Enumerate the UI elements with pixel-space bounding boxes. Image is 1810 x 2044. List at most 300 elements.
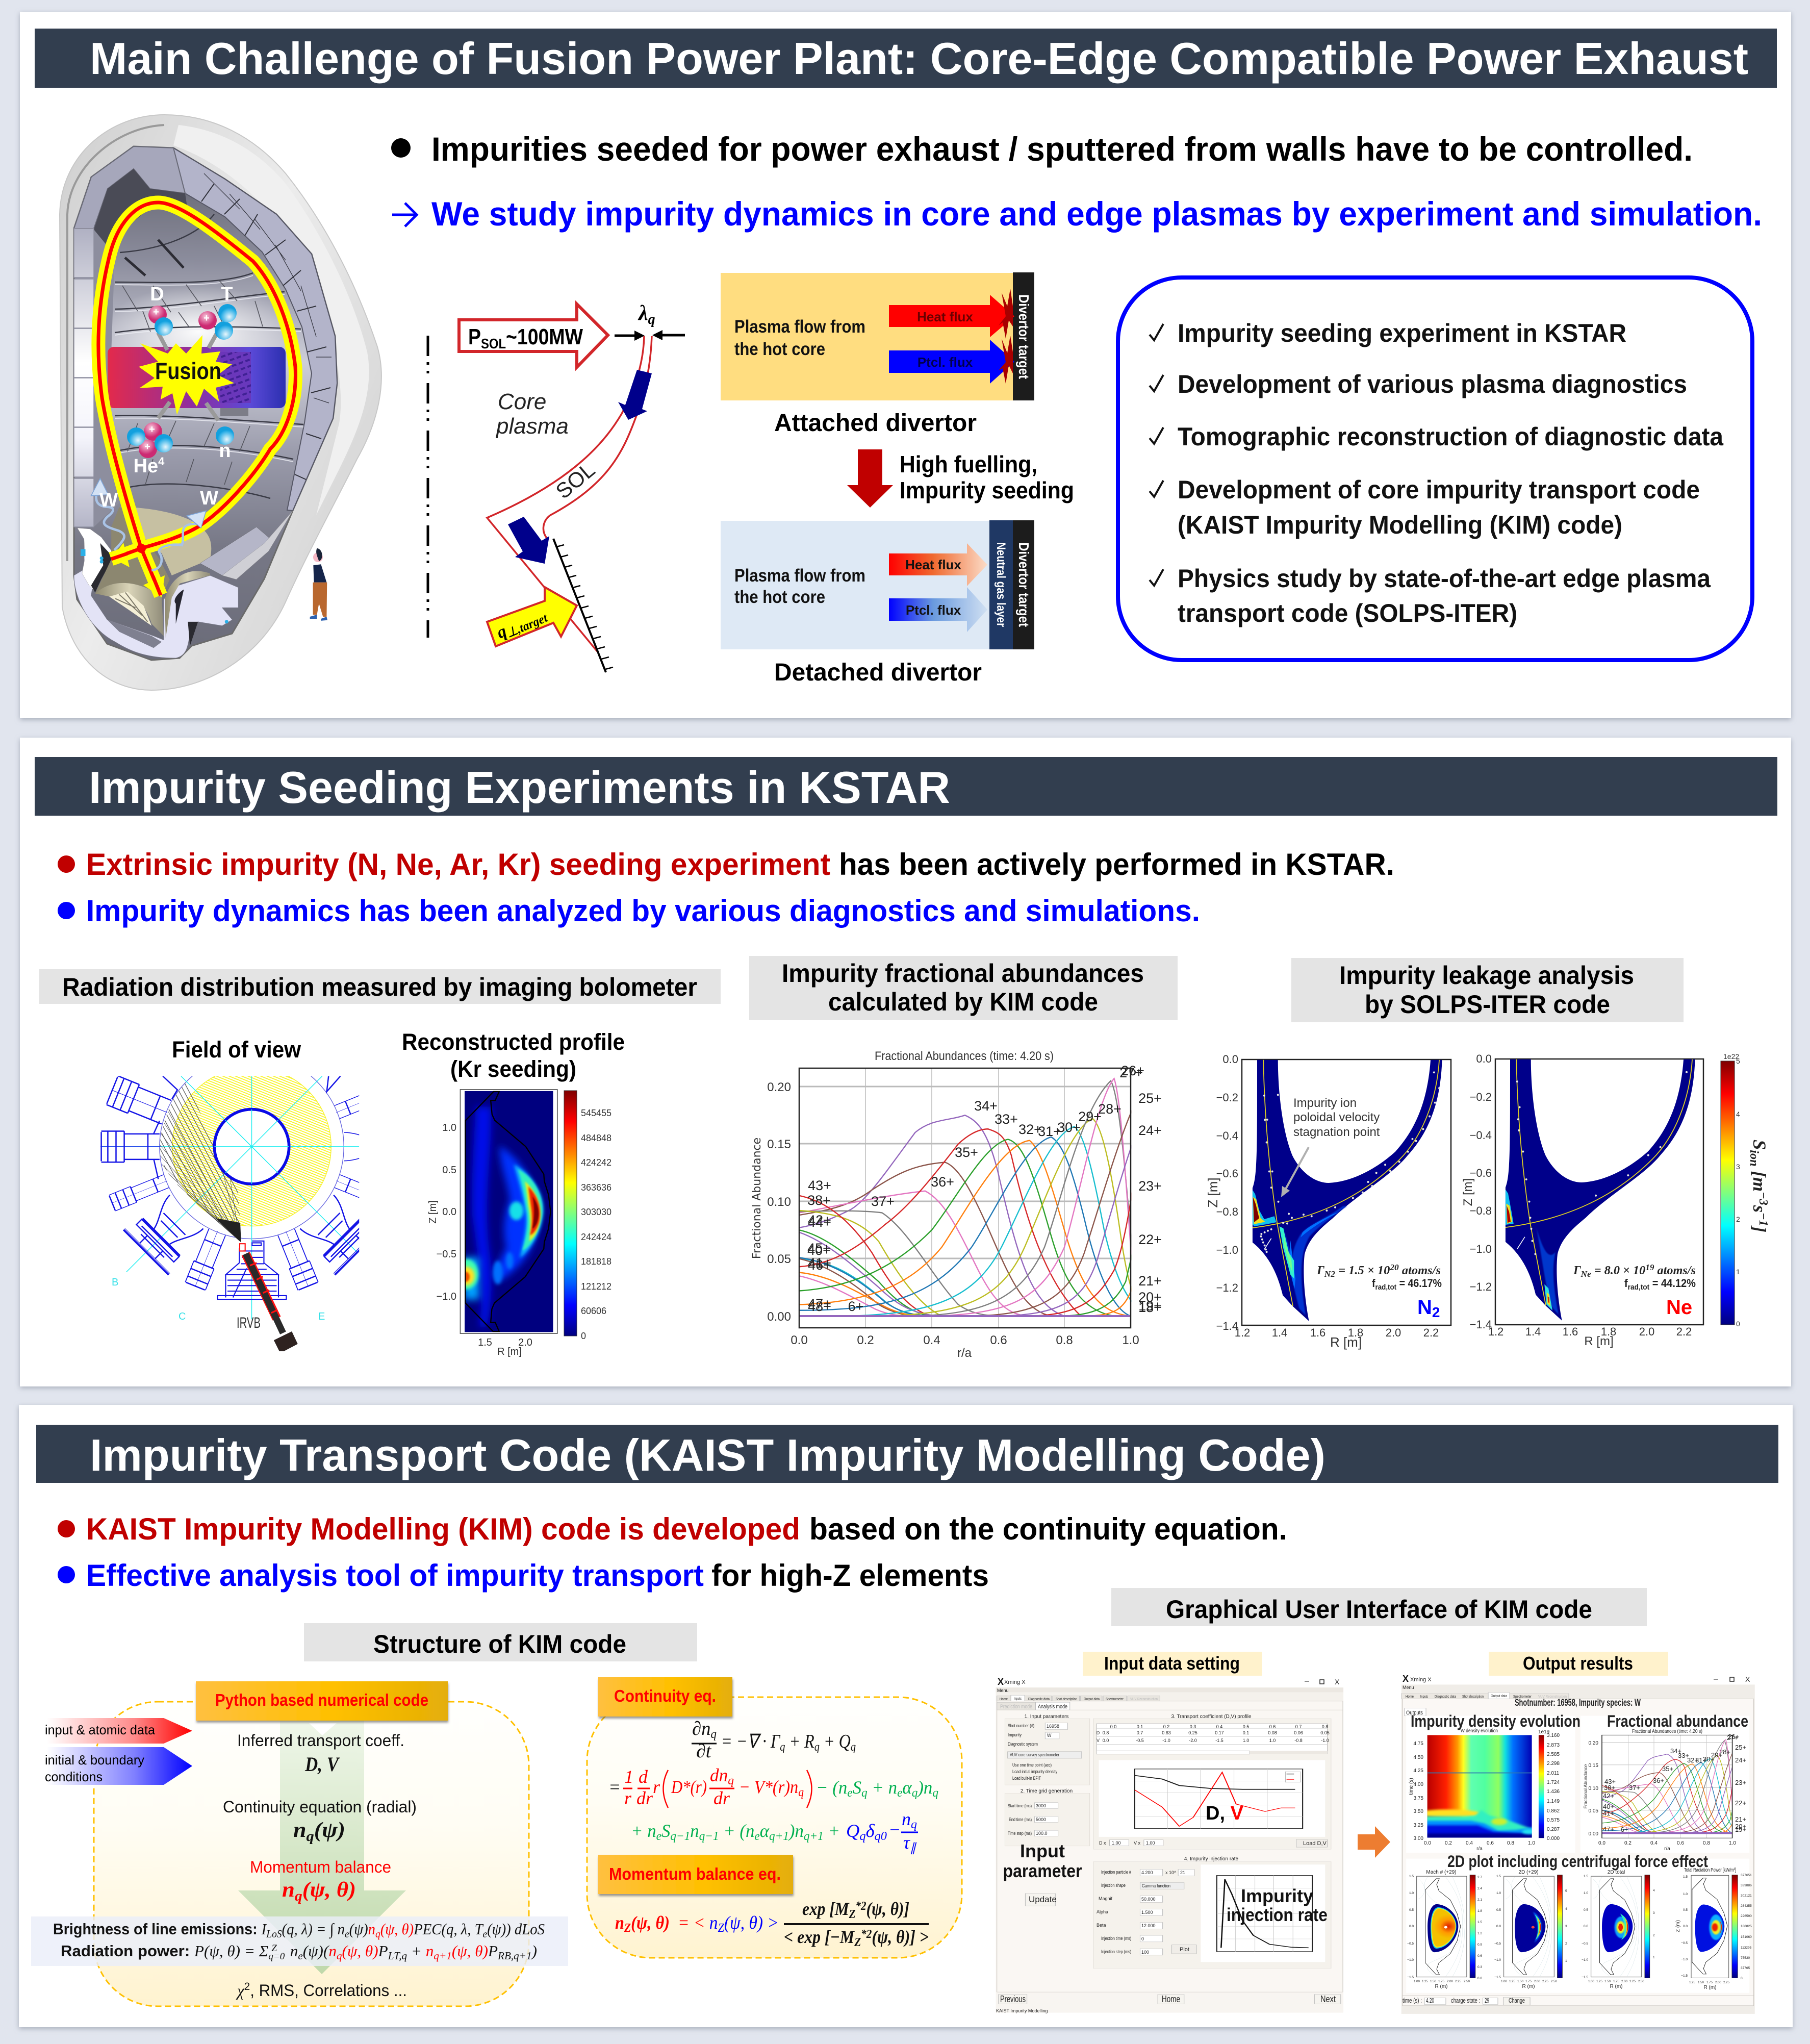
gui window: outputs: 0.6 [1487, 1840, 1494, 1846]
chart: SOLPS N2: Z [m] [1205, 1177, 1220, 1208]
gui window: outputs: 25+ [1735, 1744, 1746, 1751]
gui window: outputs: Fractional Abundance [1583, 1764, 1588, 1809]
gui window: inputs: 3000 [1036, 1803, 1046, 1808]
equation: diffusion and source terms: − (n [816, 1777, 848, 1798]
gui window: inputs: 0.06 [1294, 1730, 1303, 1735]
charge state labels: 20+ [1138, 1290, 1162, 1305]
gui window: outputs: 1.0 [1683, 1892, 1688, 1896]
chart: SOLPS Ne: 19 [1645, 1263, 1654, 1272]
gui window: outputs: −1.5 [1681, 1974, 1688, 1978]
chart: reconstructed radiation profile: 424242 [581, 1157, 611, 1168]
equation: diffusion and source terms: + (n [719, 1821, 754, 1841]
gui window: inputs: 1.00 [1112, 1840, 1121, 1846]
particles: + [203, 313, 210, 324]
equation: diffusion and source terms: n [902, 1809, 911, 1829]
chart: SOLPS N2: −1.2 [1216, 1281, 1238, 1294]
gui window: outputs: 21+ [1735, 1815, 1746, 1823]
label: output results [1489, 1652, 1668, 1676]
equation: diffusion and source terms: q+1 [769, 1830, 789, 1843]
equation: diffusion and source terms: ∥ [910, 1841, 917, 1855]
gui window: inputs: 0.8 [1322, 1724, 1328, 1729]
gui window: inputs: Gamma function [1142, 1883, 1170, 1888]
chi square metrics: 2 [244, 1981, 250, 1992]
equation: diffusion and source terms: d [639, 1767, 648, 1787]
gui window: outputs: 1.0 [1584, 1891, 1588, 1895]
gui window: outputs: 1.0 [1729, 1840, 1736, 1846]
charge state labels: 48+ [808, 1299, 831, 1314]
gui window: inputs: 0.25 [1188, 1730, 1197, 1735]
colourbar: ionization source: 3 [1736, 1163, 1740, 1171]
PSOL arrow [459, 304, 608, 367]
annotation: stagnation point: poloidal velocity [1293, 1111, 1380, 1124]
equation: continuity: + R [785, 1731, 814, 1752]
PSOL arrow: P [468, 324, 483, 349]
gui window: inputs: W [1047, 1733, 1052, 1738]
chart: SOLPS N2: 1.2 [1235, 1326, 1250, 1339]
chart: SOLPS N2: 20 [1389, 1263, 1399, 1272]
gui window: inputs: -1.0 [1321, 1738, 1329, 1743]
gui window: inputs: Diagnostic data [1028, 1697, 1050, 1701]
gui window: inputs: -0.8 [1294, 1738, 1303, 1743]
gui window: inputs: Plot [1180, 1947, 1189, 1953]
flow steps: q [295, 1888, 302, 1904]
gui window: inputs: 1.0 [1243, 1738, 1249, 1743]
gui window: inputs: V x [1134, 1840, 1141, 1846]
fusion star: Fusion [155, 358, 221, 384]
gui window: outputs: 1.25 [1422, 1980, 1428, 1983]
gui window: inputs: Load initial impurity density [1012, 1769, 1057, 1774]
panel: governing equations [587, 1677, 962, 1958]
callout: research activities checklist: Impurity seeding experiment in KSTAR [1178, 319, 1626, 347]
gui window: inputs: Previous [1000, 1994, 1026, 2004]
gui window: outputs: −1.0 [1494, 1958, 1501, 1962]
chart: SOLPS N2: = 1.5 × 10 [1335, 1264, 1390, 1277]
colourbar: ionization source: ion [1747, 1150, 1761, 1167]
gui window: outputs: 0.00 [1589, 1831, 1598, 1837]
gui window: outputs: R (m) [1435, 1984, 1447, 1989]
gui window: outputs: Change [1509, 1997, 1525, 2004]
gui window: inputs [996, 1677, 1343, 2013]
charge state labels: 44+ [808, 1215, 831, 1230]
diagram: attached divertor: Attached divertor [774, 410, 977, 437]
gui window: outputs: 2.50 [1638, 1980, 1644, 1983]
chart: fractional abundances: 0.6 [990, 1333, 1007, 1347]
gui window: inputs: 100.0 [1036, 1831, 1048, 1836]
gui window: outputs: 1.8 [1477, 1909, 1482, 1913]
arrow: high fuelling, impurity seeding [847, 449, 1074, 508]
gui window: outputs: 0.0 [1477, 1977, 1482, 1980]
gui window: inputs: 3. Transport coefficient (D,V) profile [1171, 1714, 1252, 1720]
synthetic diagnostics equations: e [345, 1928, 349, 1940]
gui window: outputs: 36+ [1653, 1777, 1664, 1784]
gui window: inputs: Prediction mode [1000, 1704, 1032, 1710]
bullet: analysis: Impurity dynamics has been analyzed by various diagnostics and simulations. [86, 894, 1200, 928]
gui window: outputs: 0.9 [1477, 1943, 1482, 1947]
gui window: outputs: 2.00 [1621, 1980, 1627, 1983]
chart: SOLPS Ne: 0.0 [1476, 1052, 1492, 1065]
bullet: analysis tool [58, 1558, 989, 1593]
gui window: outputs: 1.0 [1409, 1891, 1414, 1895]
gui window: outputs: 2.50 [1464, 1980, 1470, 1983]
outer blanket modules [173, 148, 337, 511]
flow steps: (ψ, θ) [302, 1878, 356, 1902]
gui window: outputs: 34+ [1670, 1747, 1681, 1755]
particle labels [99, 284, 233, 511]
particle labels: W [99, 490, 118, 511]
annotation: input parameter: parameter [1003, 1860, 1082, 1881]
equation: diffusion and source terms [608, 1765, 938, 1855]
label: momentum balance eq: Momentum balance eq. [609, 1864, 781, 1883]
gui window: outputs: 0.15 [1589, 1763, 1598, 1769]
annotation: stagnation point: Impurity ion [1293, 1096, 1357, 1110]
chart: SOLPS Ne: −1.2 [1470, 1280, 1492, 1293]
gui window: outputs: 4 [1565, 1907, 1567, 1911]
gui window: outputs: 24+ [1735, 1756, 1746, 1764]
gui window: outputs: 26+ [1728, 1733, 1739, 1740]
gui window: outputs: 4.00 [1414, 1782, 1423, 1787]
gui window: inputs: D x [1099, 1840, 1106, 1846]
gui window: outputs: 5 [1565, 1889, 1567, 1893]
heatmap: density evolution [1416, 1735, 1539, 1845]
gui window: outputs: 43+ [1604, 1778, 1616, 1785]
gui window: outputs: 29+ [1711, 1751, 1722, 1759]
chart: reconstructed radiation profile: −0.5 [437, 1249, 456, 1260]
gui window: inputs: 0.4 [1216, 1724, 1222, 1729]
equation: momentum balance: (ψ, θ)] > [872, 1927, 929, 1947]
gui window: outputs: 2.7 [1477, 1876, 1482, 1879]
gui window: outputs: 0.4 [1466, 1840, 1473, 1846]
diagram: bolometer field of view: IRVB [237, 1315, 261, 1331]
gui window: outputs: 1.50 [1698, 1981, 1704, 1984]
chart: SOLPS N2: Γ [1317, 1264, 1324, 1277]
gui window: inputs: Analysis mode [1038, 1704, 1067, 1710]
gui window: inputs: Load D,V [1303, 1840, 1327, 1847]
gui window: outputs: 1.5 [1496, 1875, 1501, 1878]
chart: SOLPS Ne: Ne [1580, 1269, 1591, 1279]
chart: reconstructed radiation profile: 0 [581, 1331, 586, 1341]
charge state labels: 43+ [808, 1178, 831, 1193]
chart: fractional abundances: 0.2 [857, 1333, 874, 1347]
gui window: inputs: 1.00 [1146, 1840, 1155, 1846]
charge state labels: 27+ [1119, 1065, 1143, 1080]
annotation: impurity injection rate: Impurity [1241, 1885, 1313, 1906]
equation: momentum balance: *2 [856, 1900, 866, 1913]
flow steps [223, 1731, 417, 1904]
gui window: outputs: 0.0 [1598, 1840, 1605, 1846]
synthetic diagnostics equations: (ψ, θ) [452, 1942, 488, 1960]
label: input data setting: Input data setting [1104, 1653, 1240, 1674]
chart: SOLPS N2: −1.0 [1216, 1244, 1238, 1256]
annotation: impurity injection rate: injection rate [1227, 1904, 1328, 1925]
bottom port stack [217, 1241, 286, 1299]
diagram: scrape-off-layer schematic [428, 301, 685, 672]
gui window: outputs: 2.25 [1542, 1980, 1548, 1983]
flow steps: D, V [304, 1753, 340, 1776]
gui window: outputs: 0.5 [1409, 1908, 1414, 1912]
core plasma label [495, 389, 569, 439]
equation: diffusion and source terms: α [760, 1821, 770, 1841]
chart: reconstructed radiation profile: −1.0 [437, 1291, 456, 1302]
equation: diffusion and source terms: e [897, 1786, 903, 1800]
gui window: outputs: time (s) : [1403, 1997, 1422, 2004]
equation: diffusion and source terms: dr [636, 1788, 653, 1808]
chart: SOLPS Ne: 1.6 [1563, 1325, 1578, 1338]
equation: momentum balance: *2 [861, 1928, 872, 1941]
gui window: outputs: 377651 [1741, 1874, 1752, 1877]
charge state labels: 45+ [807, 1241, 831, 1256]
chart: SOLPS Ne: 1.8 [1601, 1325, 1616, 1338]
equation: diffusion and source terms: α [902, 1777, 912, 1798]
gui window: outputs: charge state : [1451, 1997, 1480, 2004]
chart: reconstructed radiation profile: 1.5 [478, 1337, 492, 1348]
gui window: outputs: 3.160 [1547, 1733, 1560, 1738]
equation: diffusion and source terms: = [608, 1777, 621, 1797]
heading: graphical user interface [1111, 1588, 1647, 1626]
gui window: outputs: 2.50 [1551, 1980, 1557, 1983]
chart: SOLPS N2: f [1372, 1277, 1375, 1290]
diagram: detached divertor: Divertor target [1016, 542, 1032, 627]
equation: continuity: q [780, 1740, 785, 1754]
gui window: inputs: Injection shape [1101, 1883, 1126, 1888]
gui window: inputs: Alpha [1097, 1909, 1108, 1914]
gui window: outputs: 0.6 [1477, 1954, 1482, 1958]
gui window: outputs: −1.0 [1681, 1958, 1688, 1961]
gui window: inputs: X [1335, 1678, 1340, 1686]
gui window: outputs: 1.00 [1501, 1980, 1507, 1983]
gui window: outputs: Outputs [1406, 1710, 1423, 1716]
chart: SOLPS Ne: −0.2 [1470, 1091, 1492, 1103]
gui window: inputs: 0.0 [1103, 1738, 1109, 1743]
synthetic diagnostics equations: n [426, 1942, 488, 1962]
annotation: stagnation point: stagnation point [1293, 1125, 1380, 1139]
charge state labels: 25+ [1138, 1091, 1162, 1106]
chart: SOLPS Ne: Ne [1666, 1296, 1692, 1319]
gui window: inputs: X [998, 1677, 1004, 1687]
equation: diffusion and source terms: δ [866, 1821, 875, 1841]
diagram: detached divertor: Ptcl. flux [906, 602, 961, 618]
annotation: impurity injection rate [1227, 1885, 1328, 1925]
charge state labels: 23+ [1138, 1178, 1162, 1194]
gui window: outputs: 1.0 [1496, 1891, 1501, 1895]
chi square metrics: χ [236, 1981, 245, 2000]
gui window: inputs: Magnif [1099, 1896, 1113, 1901]
label: reconstructed profile: Reconstructed profile [402, 1029, 625, 1055]
gui window: inputs: VUV Reconstruction [1130, 1697, 1158, 1701]
gui window: outputs: 2.1 [1477, 1898, 1482, 1902]
charge state labels: 37+ [871, 1194, 895, 1209]
synthetic diagnostics equations: (ψ)) dLoS [487, 1920, 545, 1938]
green flow arrow [238, 1721, 406, 1974]
flow steps: q [307, 1829, 314, 1845]
gui window: outputs: 31+ [1695, 1756, 1706, 1764]
chart: SOLPS Ne: −0.4 [1470, 1129, 1492, 1142]
chart: SOLPS N2: 2 [1432, 1304, 1440, 1320]
gui window: outputs: 41+ [1603, 1809, 1614, 1817]
diagram: bolometer field of view: B [112, 1277, 118, 1288]
title bar: Impurity Transport Code (KAIST Impurity Modelling Code) [90, 1430, 1325, 1480]
gui window: inputs: 0.2 [1163, 1724, 1169, 1729]
gui window: inputs: 0.3 [1190, 1724, 1196, 1729]
flow steps: n [293, 1819, 305, 1842]
gui window: outputs: 0.20 [1589, 1740, 1598, 1746]
gui window: outputs: 42+ [1603, 1792, 1614, 1800]
chart: SOLPS N2: N [1417, 1296, 1432, 1319]
diagram: attached divertor: Ptcl. flux [917, 355, 973, 370]
equation: momentum balance: (ψ, θ) [631, 1912, 670, 1933]
gui window: outputs: 0.862 [1547, 1808, 1560, 1814]
equation: continuity: q [814, 1740, 820, 1754]
chart: SOLPS N2: 1.6 [1310, 1326, 1325, 1339]
heading: impurity leakage: Impurity leakage analysis [1339, 961, 1634, 990]
gui window: outputs: 2D (+29) [1518, 1870, 1539, 1875]
gui window: outputs: 1.75 [1706, 1981, 1713, 1984]
chart: fractional abundances: 1.0 [1122, 1333, 1139, 1347]
chart: SOLPS Ne: Γ [1573, 1264, 1581, 1277]
equation: momentum balance: Z [624, 1922, 631, 1935]
chart: reconstructed radiation profile: R [m] [497, 1346, 522, 1357]
particles [127, 304, 237, 458]
gui window: inputs: Inputs [1014, 1696, 1022, 1701]
gui window: outputs: 1.50 [1430, 1980, 1436, 1983]
reaction arrows [158, 332, 218, 420]
chart: SOLPS Ne: −0.6 [1470, 1167, 1492, 1179]
gui window: outputs: Inputs [1420, 1694, 1428, 1699]
gui window: outputs: r/a [1476, 1846, 1483, 1852]
chart: reconstructed radiation profile: 60606 [581, 1306, 606, 1316]
flow steps: (ψ) [314, 1819, 345, 1842]
equation: diffusion and source terms: dn [710, 1765, 728, 1785]
chart: SOLPS Ne: rad,tot [1628, 1283, 1649, 1292]
synthetic diagnostics equations: LoS [266, 1928, 282, 1940]
label: momentum balance eq [598, 1855, 793, 1894]
gui window: outputs: 1.75 [1613, 1980, 1619, 1983]
charge state labels: 40+ [807, 1243, 831, 1258]
chart: SOLPS Ne: −1.4 [1470, 1318, 1492, 1331]
particle labels: 4 [158, 455, 165, 468]
chart: SOLPS Ne: 1.4 [1525, 1325, 1541, 1338]
charge state labels: 42+ [808, 1213, 831, 1228]
equation: diffusion and source terms: q0 [875, 1830, 887, 1843]
gui window: outputs: 0.5 [1683, 1908, 1688, 1912]
gui window: outputs: 1.25 [1689, 1981, 1695, 1984]
gui window: outputs: W density evolution [1461, 1728, 1498, 1734]
gui window: outputs: 0.0 [1424, 1840, 1431, 1846]
gui window: outputs: 0.575 [1547, 1818, 1560, 1823]
charge state labels: 46+ [808, 1257, 831, 1273]
gui window: inputs: -1.5 [1215, 1738, 1223, 1743]
heading: fractional abundances: Impurity fractional abundances [782, 959, 1144, 988]
charge state labels: 24+ [1138, 1123, 1162, 1138]
heading: graphical user interface: Graphical User Interface of KIM code [1166, 1595, 1592, 1624]
SOL channel [487, 336, 652, 651]
gui window: outputs: Shot description [1462, 1694, 1484, 1699]
chart: fractional abundances: 0.10 [767, 1195, 791, 1209]
gui window: outputs: 1.5 [1683, 1875, 1688, 1879]
gui window: outputs: 1.436 [1547, 1789, 1560, 1795]
panel: main challenge [20, 12, 1791, 718]
gui window: outputs: 1.25 [1596, 1980, 1602, 1983]
equation: diffusion and source terms: − V*(r)n [739, 1777, 805, 1797]
gui window: outputs: 2D plot including centrifugal force effect [1447, 1852, 1708, 1871]
flow steps: Inferred transport coeff. [237, 1731, 404, 1750]
gui window: outputs: 0.8 [1507, 1840, 1514, 1846]
chart: reconstructed radiation profile: 121212 [581, 1281, 611, 1292]
gui window: outputs: 23+ [1735, 1779, 1746, 1786]
charge state labels: 34+ [974, 1098, 998, 1114]
equation: diffusion and source terms: e [656, 1830, 661, 1843]
gui window: outputs: 1.00 [1588, 1980, 1594, 1983]
gui window: outputs: 3.50 [1414, 1809, 1423, 1814]
gui window: inputs: Time step (ms) [1008, 1831, 1032, 1836]
particle labels: n [219, 440, 231, 462]
gui window: outputs: 33+ [1678, 1752, 1689, 1759]
synthetic diagnostics equations: LT,q [388, 1950, 407, 1962]
gui window: outputs: −0.5 [1681, 1941, 1688, 1945]
statement: we study impurity dynamics: We study impurity dynamics in core and edge plasmas by experiment and simulation. [431, 195, 1762, 233]
colourbar: ionization source: 2 [1736, 1215, 1740, 1223]
chart: reconstructed radiation profile: 303030 [581, 1207, 611, 1217]
diagram: attached divertor: Divertor target [1016, 294, 1032, 379]
gui window: inputs: 5000 [1036, 1817, 1046, 1822]
heading: impurity leakage: by SOLPS-ITER code [1365, 990, 1610, 1019]
bullet: KIM code: KAIST Impurity Modelling (KIM) code is developed [86, 1512, 800, 1546]
gui window: outputs: R (m) [1610, 1984, 1623, 1989]
annotation: D,V: D, V [1206, 1803, 1244, 1824]
colourbar: ionization source: ] [1749, 1225, 1770, 1232]
equation: momentum balance [615, 1899, 929, 1949]
gui window: inputs: 1.0 [1269, 1738, 1276, 1743]
gui window: outputs: 2 [1653, 1934, 1655, 1937]
callout: research activities checklist: Tomographic reconstruction of diagnostic data [1178, 422, 1724, 451]
equation: diffusion and source terms: )n [788, 1821, 804, 1841]
charge state labels: 47+ [808, 1296, 831, 1311]
colourbar: ionization source: 1 [1736, 1268, 1740, 1276]
diagram: attached divertor: Heat flux [917, 309, 973, 324]
gui window: outputs: 188825 [1741, 1925, 1752, 1928]
bullet: KIM code: based on the continuity equation. [809, 1512, 1287, 1546]
gui window: outputs: 4.25 [1414, 1768, 1423, 1774]
charge state labels: 6+ [848, 1299, 863, 1314]
equation: diffusion and source terms: q [911, 1818, 917, 1831]
tokamak cross-section illustration [60, 115, 381, 690]
colourbar: ionization source: 5 [1736, 1057, 1740, 1065]
synthetic diagnostics equations: P [488, 1942, 498, 1960]
synthetic diagnostics equations: q [337, 1950, 342, 1962]
colourbar: ionization source: [m [1749, 1167, 1770, 1192]
synthetic diagnostics equations: + [407, 1942, 426, 1960]
gui window: outputs: 2.585 [1547, 1752, 1560, 1757]
heading: fractional abundances: calculated by KIM code [828, 988, 1098, 1016]
equation: momentum balance: > [763, 1912, 779, 1933]
gui window: outputs: 4.75 [1414, 1741, 1423, 1747]
core plasma label: plasma [495, 414, 569, 439]
particle labels: He [134, 456, 158, 477]
bullet: extrinsic seeding: Extrinsic impurity (N, Ne, Ar, Kr) seeding experiment [86, 847, 830, 881]
gui window: inputs: Beta [1097, 1923, 1106, 1928]
gui window: inputs: 0.05 [1320, 1730, 1330, 1735]
chart: fractional abundances: 0.05 [767, 1252, 791, 1266]
input arrows: input & atomic data [45, 1722, 156, 1737]
gui window: inputs: 0.7 [1137, 1730, 1143, 1735]
gui window: outputs: Spectrometer [1513, 1694, 1532, 1699]
bullet: extrinsic seeding: has been actively performed in KSTAR. [839, 847, 1394, 881]
gui window: outputs: Home [1406, 1694, 1414, 1699]
inner wall bands [115, 214, 303, 498]
gui window: outputs: Total Radiation Power [kW/m³] [1684, 1868, 1736, 1873]
synthetic diagnostics equations: ) [531, 1942, 537, 1960]
gui window: outputs: 3.00 [1414, 1836, 1423, 1841]
target plate [553, 539, 606, 672]
